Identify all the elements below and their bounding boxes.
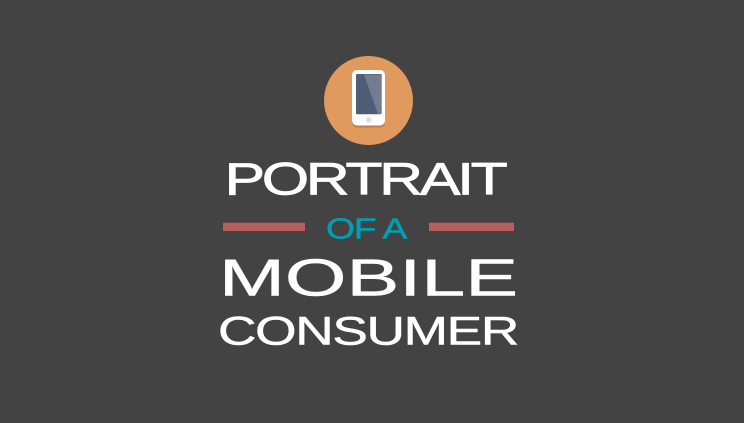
heading: OF A: OF A: [326, 214, 408, 246]
icon: smartphone in orange circle: [324, 56, 413, 145]
heading: PORTRAIT: PORTRAIT: [224, 154, 507, 204]
divider: right bar: [429, 223, 514, 231]
heading: MOBILE: MOBILE: [219, 250, 518, 308]
divider: left bar: [223, 223, 305, 231]
heading: CONSUMER: CONSUMER: [218, 310, 518, 354]
